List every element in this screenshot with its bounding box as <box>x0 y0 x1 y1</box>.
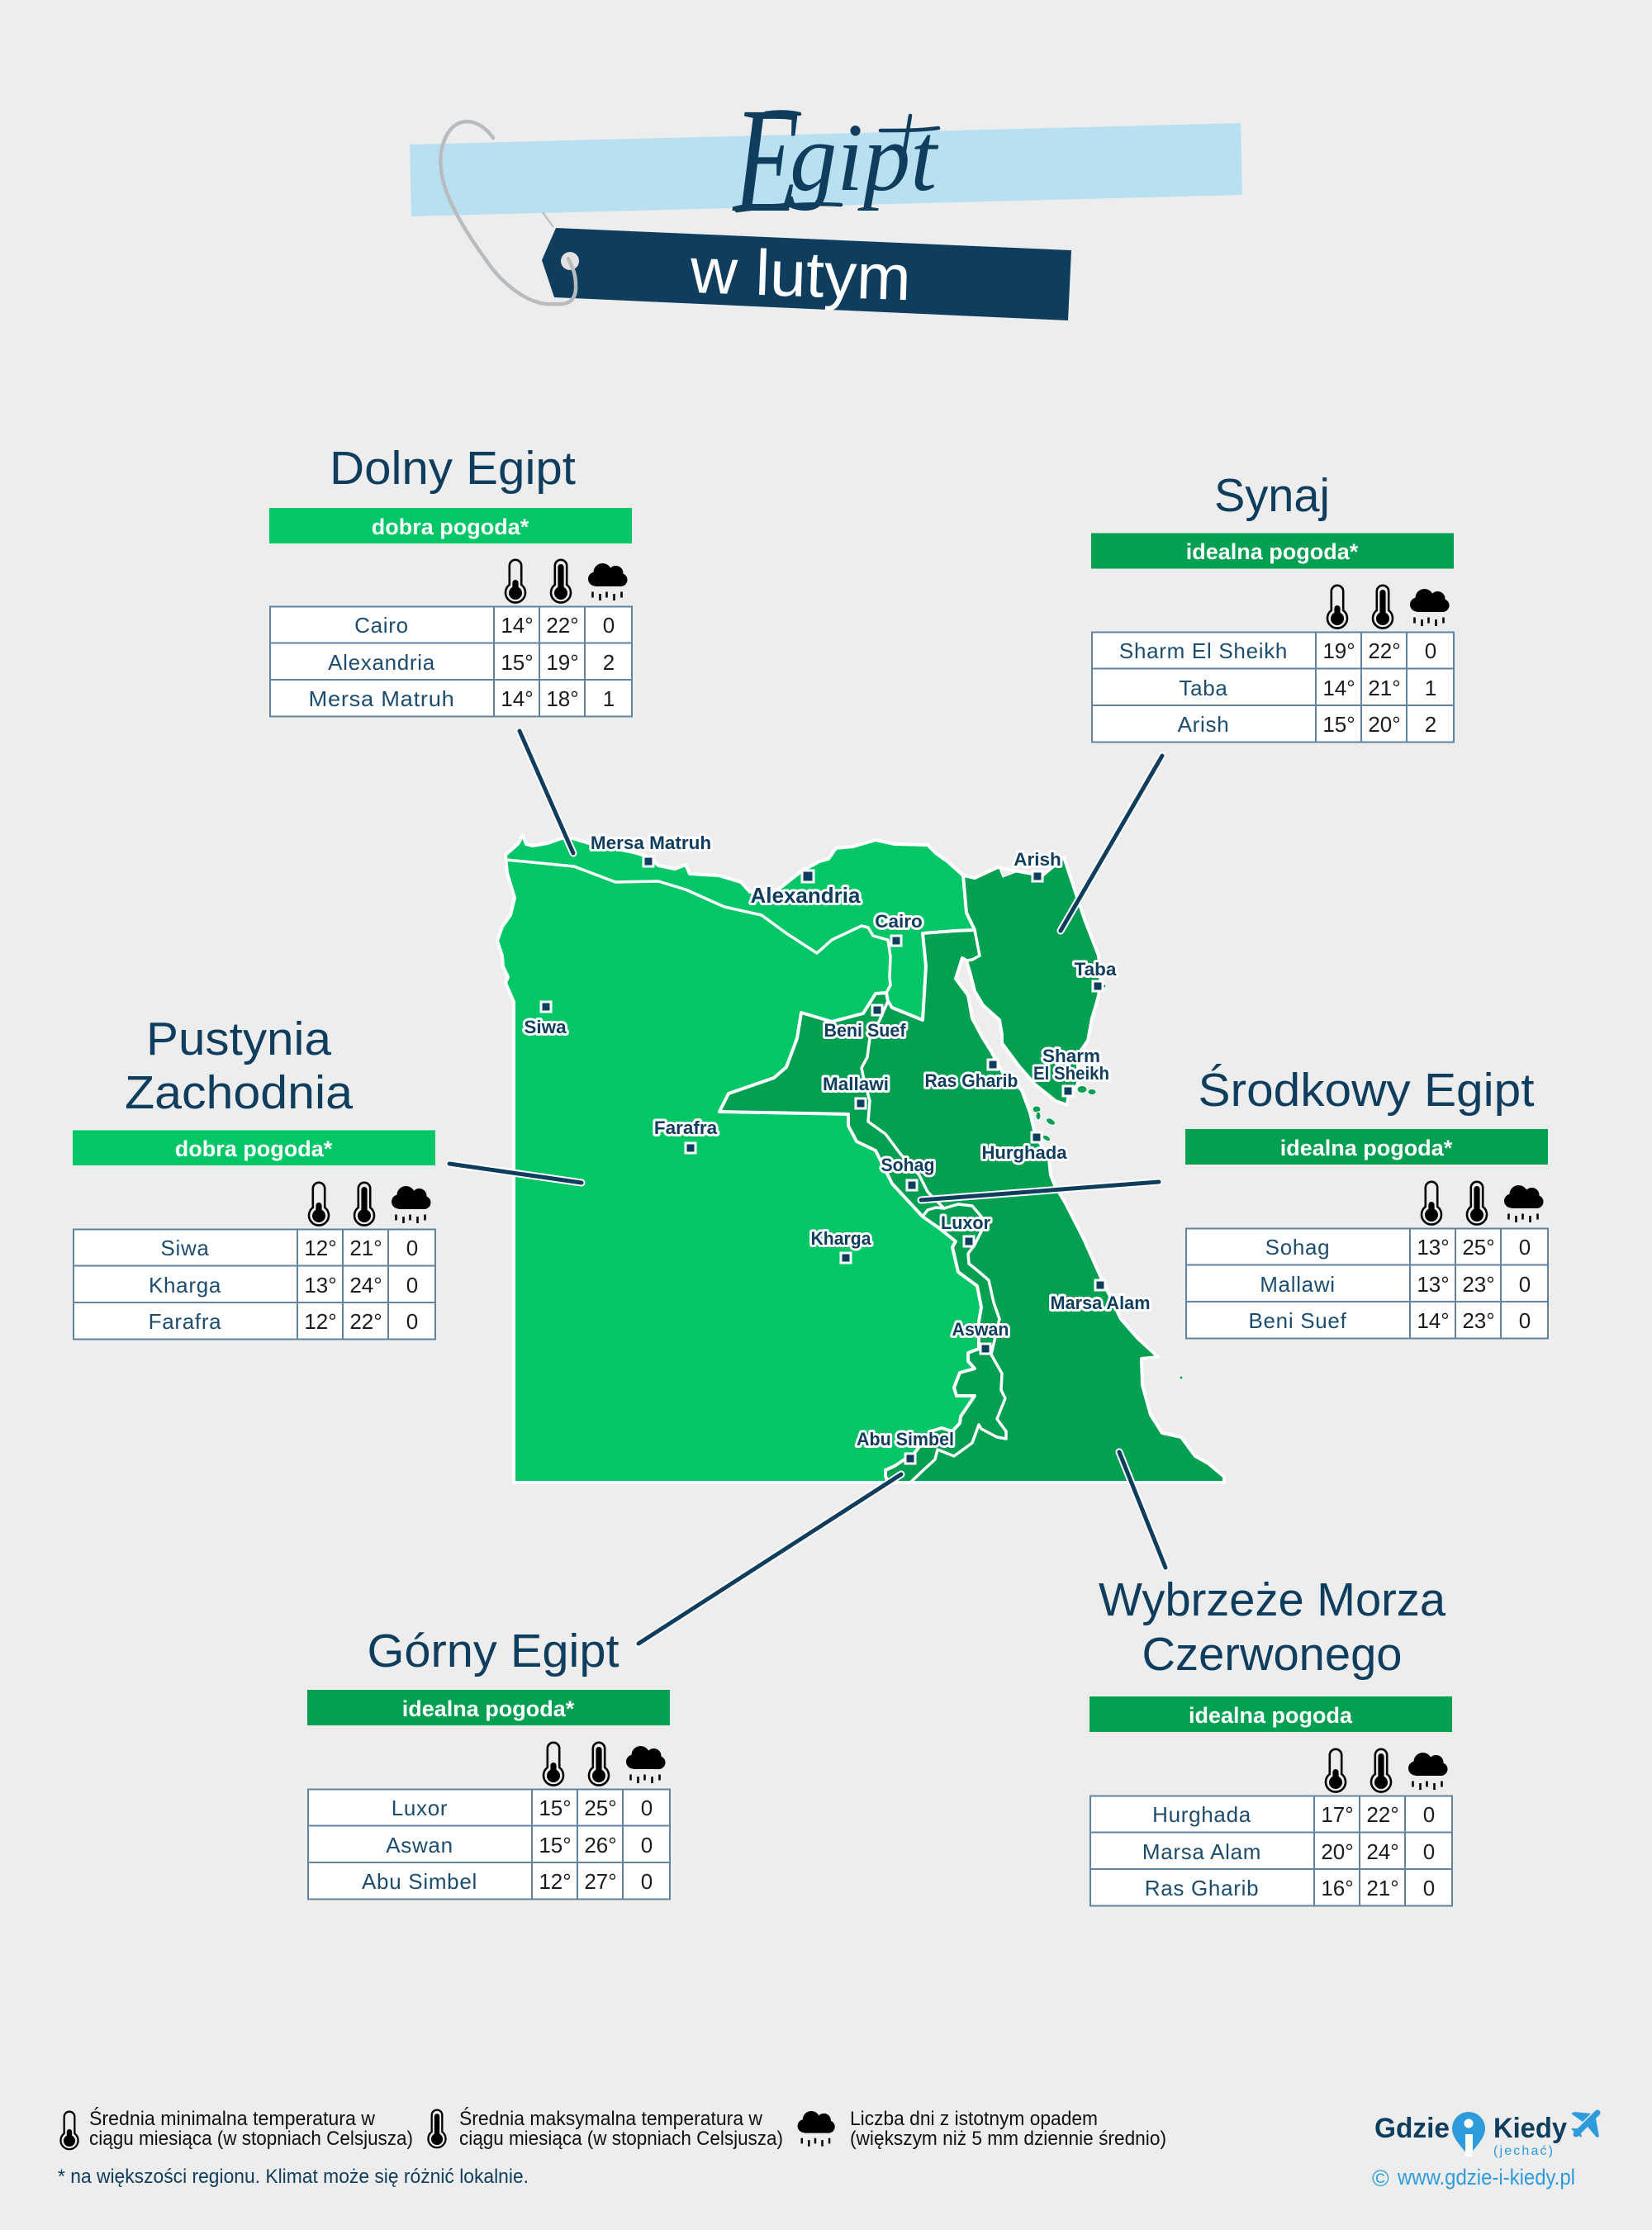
city labels: Alexandria <box>751 883 861 908</box>
icons <box>544 1743 666 1786</box>
panel: Górny Egipt <box>307 1625 670 1900</box>
footnote: * na większości regionu. Klimat może się różnić lokalnie. <box>58 2166 529 2188</box>
border lines between regions <box>506 860 1006 1483</box>
table: Sharm El Sheikh <box>1119 638 1288 663</box>
legend text: maximum temperature: Średnia maksymalna temperatura w <box>459 2107 763 2130</box>
table: 19° <box>1322 638 1355 663</box>
table: 12° <box>304 1309 337 1334</box>
table: 15° <box>539 1833 572 1858</box>
city labels: Sharm <box>1042 1046 1100 1066</box>
table: Mallawi <box>1260 1272 1336 1297</box>
heading <box>1099 1573 1446 1681</box>
icon: location pin <box>1452 2112 1485 2156</box>
rating bar: dobra pogoda* <box>372 515 529 539</box>
city labels: Kharga <box>811 1228 871 1249</box>
rating bar <box>307 1690 670 1725</box>
table: Ras Gharib <box>1145 1876 1259 1900</box>
city labels: Ras Gharib <box>925 1070 1018 1091</box>
table: 0 <box>1519 1272 1531 1297</box>
city labels: Abu Simbel <box>857 1429 954 1450</box>
table: 23° <box>1462 1272 1495 1297</box>
website address: www.gdzie-i-kiedy.pl <box>1397 2165 1575 2190</box>
icon: minimum temperature <box>60 2112 78 2149</box>
table: 13° <box>1417 1272 1450 1297</box>
rating bar: idealna pogoda* <box>1186 539 1359 564</box>
rating bar <box>269 508 632 543</box>
icons <box>1327 586 1449 629</box>
city labels: Cairo <box>875 911 923 932</box>
table: 21° <box>349 1236 382 1260</box>
region: Sinai, Red Sea coast, Middle and Upper Egypt (dark) <box>497 835 1224 1483</box>
legend text: minimum temperature: ciągu miesiąca (w stopniach Celsjusza) <box>89 2128 413 2150</box>
icons <box>1326 1749 1447 1792</box>
heading <box>125 1013 353 1119</box>
heading: Górny Egipt <box>367 1625 620 1677</box>
table: Farafra <box>149 1309 221 1334</box>
table: Marsa Alam <box>1142 1839 1261 1864</box>
table: 27° <box>584 1869 617 1894</box>
city labels: Siwa <box>524 1017 567 1037</box>
table: 0 <box>1519 1235 1531 1260</box>
rating bar <box>1185 1129 1548 1165</box>
table: 0 <box>406 1236 418 1260</box>
table: Taba <box>1179 676 1228 700</box>
city labels: El Sheikh <box>1033 1063 1109 1084</box>
title banner: Egipt: gipt <box>790 103 939 211</box>
table: 0 <box>1423 1839 1435 1864</box>
table: 13° <box>304 1273 337 1298</box>
table: 0 <box>641 1833 653 1858</box>
table: Sohag <box>1265 1235 1330 1260</box>
legend text: rainy days <box>850 2108 1166 2150</box>
map of Egypt <box>497 833 1224 1483</box>
table: 0 <box>641 1869 653 1894</box>
legend text: rainy days: (większym niż 5 mm dziennie średnio) <box>850 2128 1166 2150</box>
table: Alexandria <box>328 650 435 675</box>
panel: Wybrzeże Morza Czerwonego <box>1089 1573 1452 1906</box>
region: Western Desert and Lower Egypt (light) <box>497 835 981 1483</box>
table: 0 <box>1423 1802 1435 1827</box>
panel: Dolny Egipt <box>269 442 632 717</box>
legend <box>60 2107 1166 2150</box>
table: 22° <box>1368 638 1401 663</box>
table: 15° <box>539 1796 572 1820</box>
table: 20° <box>1321 1839 1354 1864</box>
legend text: maximum temperature: ciągu miesiąca (w stopniach Celsjusza) <box>459 2128 783 2150</box>
table: Siwa <box>160 1236 210 1260</box>
rating bar: dobra pogoda* <box>175 1136 333 1161</box>
table: 21° <box>1366 1876 1399 1900</box>
legend text: minimum temperature: Średnia minimalna temperatura w <box>89 2107 376 2130</box>
logo: Gdzie i Kiedy: (jechać) <box>1493 2144 1553 2158</box>
table: 2 <box>603 650 615 675</box>
table: 15° <box>501 650 534 675</box>
city labels: Mersa Matruh <box>591 833 711 853</box>
table: Kharga <box>149 1273 221 1298</box>
table <box>1092 633 1454 742</box>
table <box>270 606 632 717</box>
table: 17° <box>1321 1802 1354 1827</box>
rating bar: idealna pogoda* <box>1280 1136 1453 1160</box>
table <box>1090 1796 1452 1906</box>
table: 1 <box>603 686 615 711</box>
logo: Gdzie i Kiedy: Gdzie <box>1374 2113 1450 2144</box>
panel: Środkowy Egipt <box>1185 1063 1548 1338</box>
islands and lagoon <box>999 869 1183 1379</box>
table: 0 <box>406 1309 418 1334</box>
table: 22° <box>349 1309 382 1334</box>
heading: Środkowy Egipt <box>1198 1063 1535 1117</box>
table: 22° <box>1366 1802 1399 1827</box>
table: 0 <box>641 1796 653 1820</box>
connector lines from panels to map <box>449 731 1165 1644</box>
table: 22° <box>546 613 579 638</box>
legend text: minimum temperature <box>89 2107 413 2150</box>
table: 0 <box>603 613 615 638</box>
table: 23° <box>1462 1308 1495 1333</box>
table: Hurghada <box>1152 1802 1251 1827</box>
heading: Pustynia <box>146 1013 331 1065</box>
icons <box>309 1183 431 1226</box>
luggage tag: w lutym <box>440 121 1071 320</box>
heading: Wybrzeże Morza <box>1099 1573 1446 1626</box>
table: 21° <box>1368 676 1401 700</box>
rating bar <box>73 1130 435 1165</box>
heading: Dolny Egipt <box>330 442 576 495</box>
city labels: Arish <box>1014 849 1061 870</box>
table: 13° <box>1417 1235 1450 1260</box>
rating bar <box>1091 534 1454 568</box>
logo: Gdzie i Kiedy: Kiedy <box>1493 2113 1567 2144</box>
icon: maximum temperature <box>428 2110 446 2147</box>
rating bar: idealna pogoda <box>1189 1703 1353 1728</box>
table: 26° <box>584 1833 617 1858</box>
table: 18° <box>546 686 579 711</box>
city labels: Aswan <box>952 1319 1009 1340</box>
table: Mersa Matruh <box>309 686 454 711</box>
table: Luxor <box>392 1796 448 1820</box>
table: 16° <box>1321 1876 1354 1900</box>
table: 0 <box>1519 1308 1531 1333</box>
table: 25° <box>584 1796 617 1820</box>
city labels: Luxor <box>941 1212 990 1233</box>
table <box>308 1789 670 1900</box>
city labels: Sohag <box>881 1155 935 1175</box>
city labels: Beni Suef <box>824 1020 906 1041</box>
icons <box>1422 1182 1543 1225</box>
heading: Czerwonego <box>1142 1628 1403 1681</box>
table <box>1186 1229 1548 1338</box>
luggage tag: w lutym: w lutym <box>688 234 912 314</box>
city labels: Marsa Alam <box>1051 1293 1150 1313</box>
city labels: Mallawi <box>823 1074 889 1094</box>
legend text: rainy days: Liczba dni z istotnym opadem <box>850 2108 1098 2130</box>
table: 1 <box>1425 676 1436 700</box>
table: Aswan <box>386 1833 453 1858</box>
rating bar <box>1089 1696 1452 1732</box>
table: 25° <box>1462 1235 1495 1260</box>
table: 14° <box>501 613 534 638</box>
rating bar: idealna pogoda* <box>402 1696 575 1721</box>
city labels: Farafra <box>654 1117 718 1138</box>
table: 15° <box>1322 712 1355 737</box>
city labels: Taba <box>1075 959 1117 980</box>
table: Arish <box>1178 712 1229 737</box>
table: 14° <box>501 686 534 711</box>
panel: Pustynia Zachodnia <box>73 1013 435 1340</box>
table: 19° <box>546 650 579 675</box>
table: Abu Simbel <box>362 1869 477 1894</box>
heading: Zachodnia <box>125 1066 353 1119</box>
icons <box>506 560 628 603</box>
table: Cairo <box>354 613 409 638</box>
city labels <box>524 833 1150 1450</box>
title banner: Egipt: E <box>732 78 800 244</box>
table: 0 <box>1423 1876 1435 1900</box>
legend text: maximum temperature <box>459 2107 783 2150</box>
table: 0 <box>1425 638 1436 663</box>
logo: Gdzie i Kiedy <box>1374 2112 1599 2158</box>
heading: Synaj <box>1214 469 1330 522</box>
city labels: Hurghada <box>981 1142 1067 1163</box>
table: 24° <box>1366 1839 1399 1864</box>
city markers <box>541 856 1105 1464</box>
title banner: Egipt <box>410 78 1242 244</box>
icon: plane <box>1571 2112 1599 2137</box>
table: 12° <box>539 1869 572 1894</box>
table: 24° <box>349 1273 382 1298</box>
table: 14° <box>1417 1308 1450 1333</box>
table <box>74 1229 435 1340</box>
table: 14° <box>1322 676 1355 700</box>
icon: rain <box>798 2111 835 2147</box>
table: Beni Suef <box>1248 1308 1347 1333</box>
table: 2 <box>1425 712 1436 737</box>
table: 0 <box>406 1273 418 1298</box>
table: 12° <box>304 1236 337 1260</box>
panel: Synaj <box>1091 469 1454 742</box>
website: © <box>1372 2166 1389 2191</box>
table: 20° <box>1368 712 1401 737</box>
